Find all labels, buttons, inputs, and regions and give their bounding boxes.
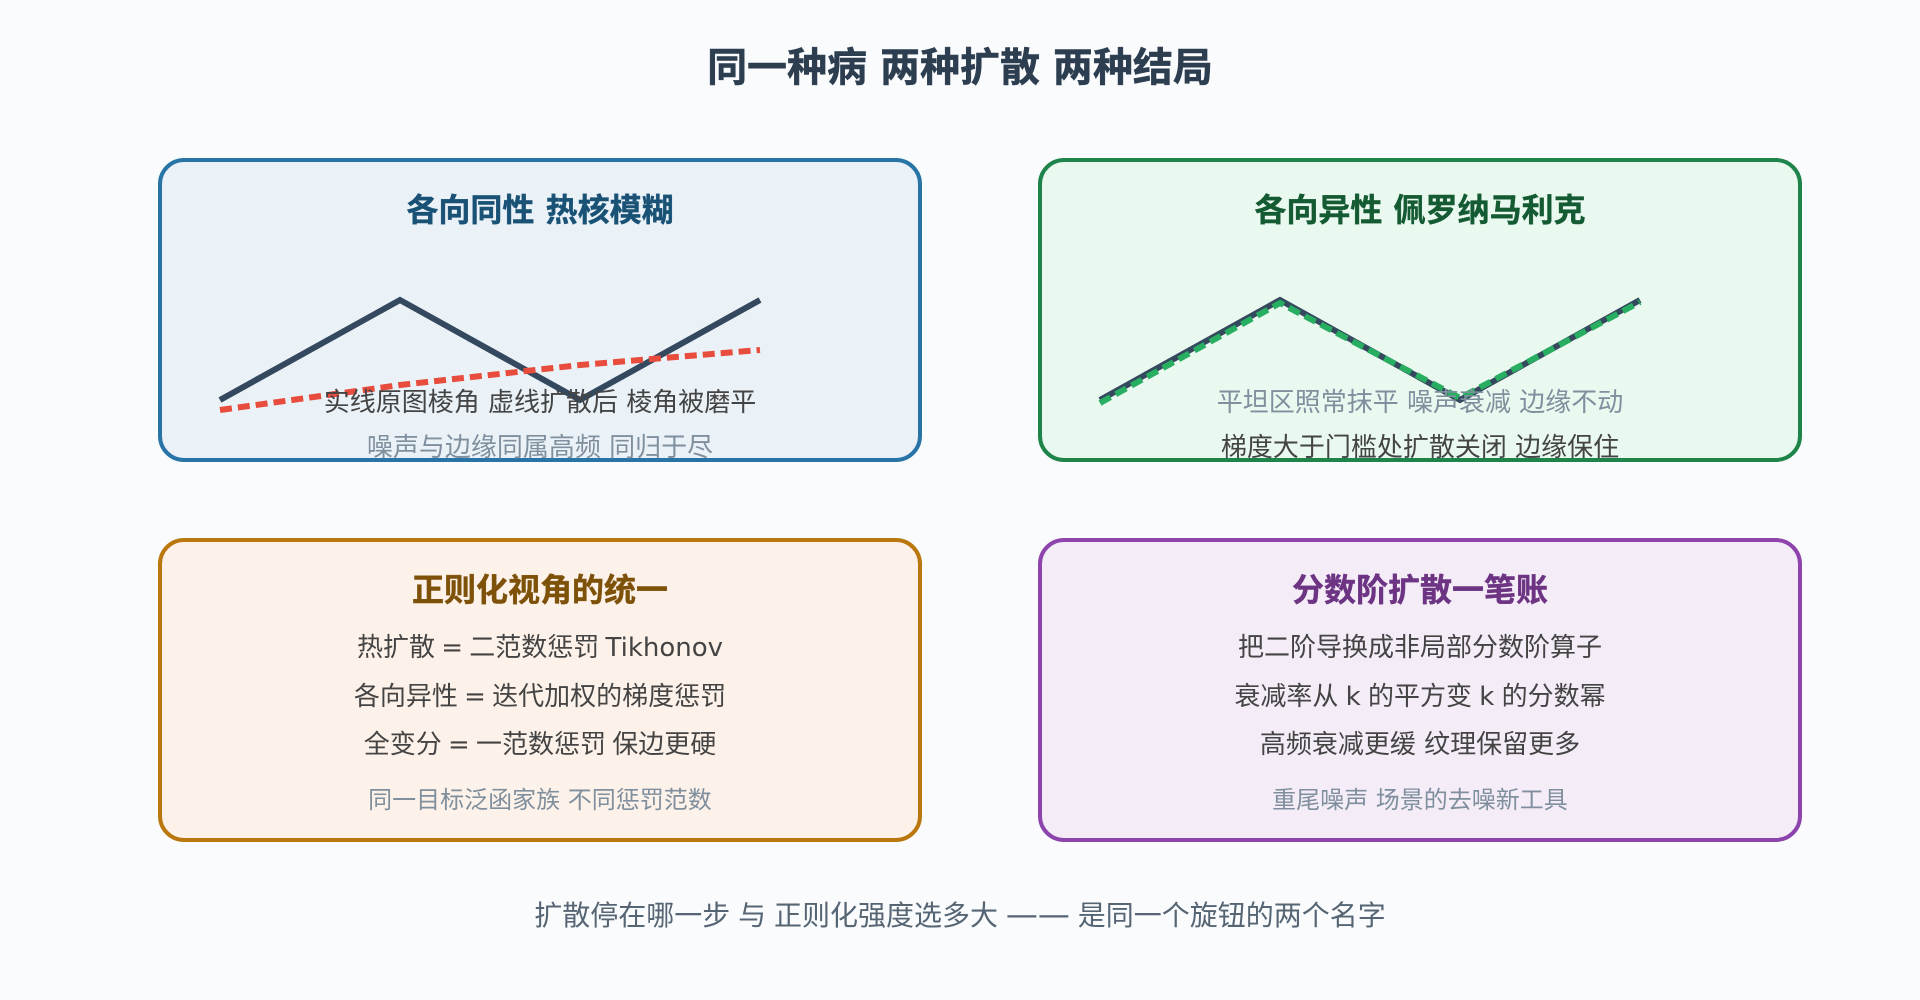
footer conclusion: 扩散停在哪一步 与 正则化强度选多大 —— 是同一个旋钮的两个名字 — [534, 895, 1386, 933]
text: chart caption: 实线原图棱角 虚线扩散后 棱角被磨平 — [324, 388, 756, 418]
text: fractional lines — [1234, 633, 1606, 760]
text: regularization note: 同一目标泛函家族 不同惩罚范数 — [368, 786, 712, 814]
text: fractional lines: 高频衰减更缓 纹理保留更多 — [1260, 730, 1580, 760]
chart: edge preserved line — [1100, 300, 1640, 403]
panel: isotropic heat kernel blur — [160, 160, 920, 463]
panel heading: fractional: 分数阶扩散一笔账 — [1292, 571, 1548, 609]
panel heading: isotropic: 各向同性 热核模糊 — [406, 191, 674, 229]
text: regularization lines: 全变分 = 一范数惩罚 保边更硬 — [364, 730, 716, 760]
text: edge note: 梯度大于门槛处扩散关闭 边缘保住 — [1221, 433, 1619, 463]
text: regularization lines: 各向异性 = 迭代加权的梯度惩罚 — [354, 682, 726, 712]
panel heading: regularization: 正则化视角的统一 — [412, 571, 668, 609]
text: fractional lines: 衰减率从 k 的平方变 k 的分数幂 — [1234, 682, 1606, 712]
panel heading: anisotropic: 各向异性 佩罗纳马利克 — [1254, 191, 1586, 229]
panel: anisotropic Perona-Malik — [1040, 160, 1800, 463]
text: regularization lines — [354, 633, 726, 760]
text: fractional note: 重尾噪声 场景的去噪新工具 — [1272, 786, 1568, 814]
text: fractional lines: 把二阶导换成非局部分数阶算子 — [1238, 633, 1602, 663]
panel: regularization view — [160, 540, 920, 840]
text: muted note: 噪声与边缘同属高频 同归于尽 — [367, 433, 713, 463]
title: 同一种病 两种扩散 两种结局 — [707, 45, 1213, 91]
chart: original edge and blurred line — [220, 300, 760, 410]
text: muted note: 平坦区照常抹平 噪声衰减 边缘不动 — [1217, 388, 1623, 418]
panel: fractional diffusion — [1040, 540, 1800, 840]
text: regularization lines: 热扩散 = 二范数惩罚 Tikhonov — [357, 633, 723, 663]
